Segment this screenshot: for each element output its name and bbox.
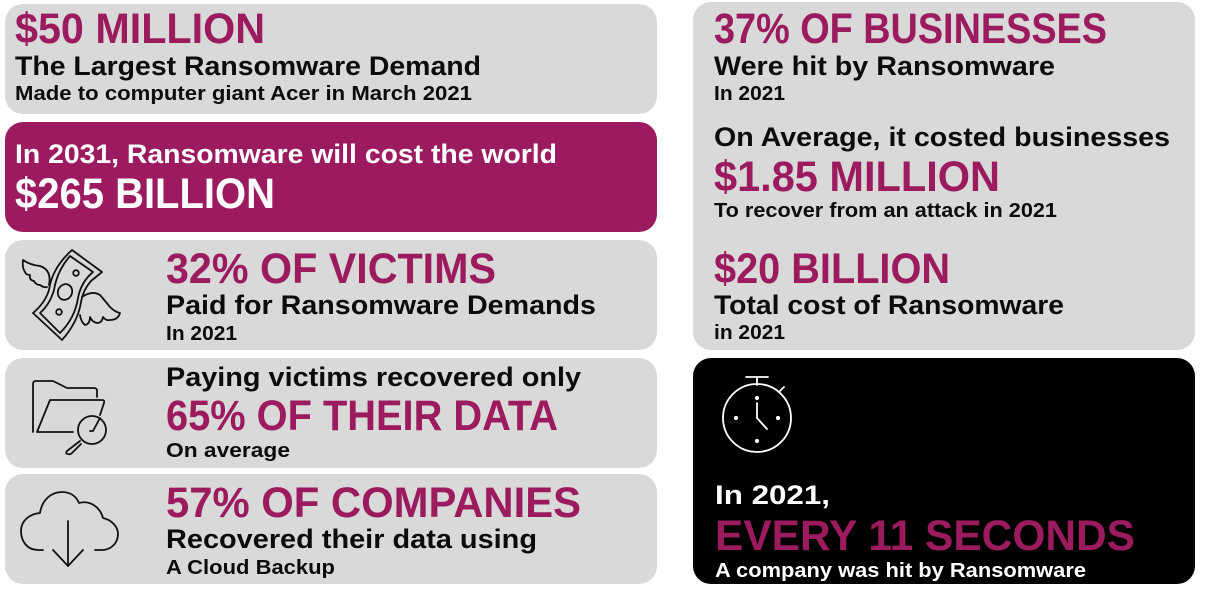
panel: 32% of victims (5, 240, 657, 350)
heading: $1.85 million: $1.85 MILLION (714, 153, 1000, 201)
text: largest ransomware demand: The Largest Ransomware Demand (15, 51, 481, 81)
icon: money with wings (23, 250, 120, 340)
heading: every 11 seconds: EVERY 11 SECONDS (715, 512, 1135, 560)
text: paid demands: Paid for Ransomware Demands (166, 290, 596, 320)
text: average cost intro: On Average, it costed businesses (714, 122, 1170, 152)
panel: largest demand (5, 4, 657, 114)
text: cloud backup: A Cloud Backup (166, 557, 335, 579)
text: acer detail: Made to computer giant Acer in March 2021 (15, 83, 472, 105)
panel: 57% of companies (5, 474, 657, 584)
icon: folder with magnifier (33, 381, 106, 454)
text: total cost: Total cost of Ransomware (714, 290, 1064, 320)
text: in 2021 intro: In 2021, (715, 480, 830, 510)
heading: $265 billion: $265 BILLION (15, 170, 275, 218)
icon: cloud download (21, 492, 118, 566)
text: in 2021: In 2021 (714, 83, 785, 105)
heading: 37% of businesses: 37% OF BUSINESSES (714, 5, 1107, 53)
text: company hit: A company was hit by Ransomware (715, 560, 1086, 582)
heading: 65% of their data: 65% OF THEIR DATA (166, 392, 558, 440)
text: in 2021 lower: in 2021 (714, 322, 785, 344)
text: hit by ransomware: Were hit by Ransomware (714, 51, 1055, 81)
text: paying victims: Paying victims recovered only (166, 362, 581, 392)
panel: every 11 seconds (693, 358, 1195, 584)
heading: $20 billion: $20 BILLION (714, 245, 950, 293)
text: recovered data: Recovered their data using (166, 524, 537, 554)
heading: 57% of companies: 57% OF COMPANIES (166, 479, 581, 527)
panel: 2031 cost (5, 122, 657, 232)
text: in 2021: In 2021 (166, 323, 237, 345)
heading: 32% of victims: 32% OF VICTIMS (166, 245, 496, 293)
panel: business statistics (693, 2, 1195, 350)
panel: 65% of data (5, 358, 657, 468)
text: on average: On average (166, 440, 290, 462)
heading: $50 million: $50 MILLION (15, 5, 265, 53)
icon: stopwatch (723, 377, 791, 452)
text: 2031 intro: In 2031, Ransomware will cost the world (15, 139, 557, 169)
text: recover from attack: To recover from an attack in 2021 (714, 200, 1057, 222)
